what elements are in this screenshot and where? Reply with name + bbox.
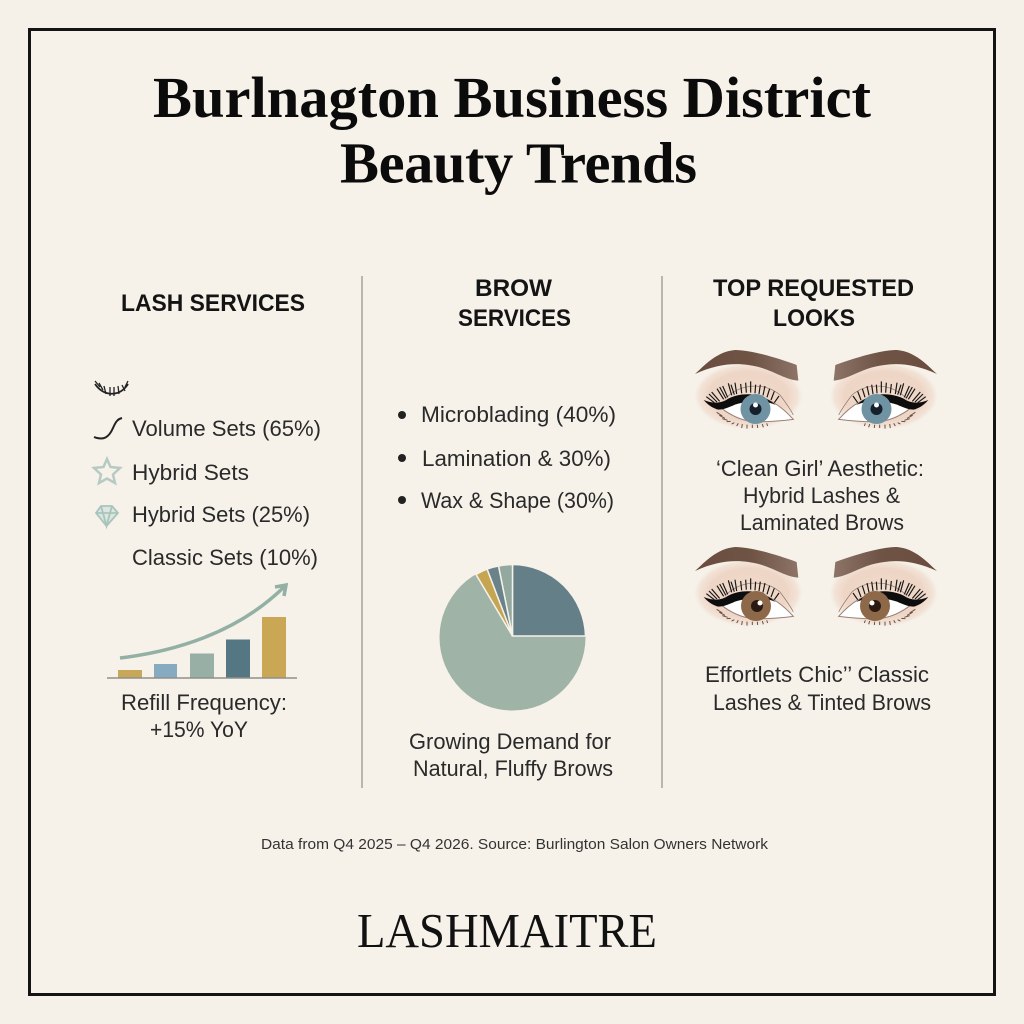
heading: brow services (458, 275, 571, 332)
icon: star (94, 459, 120, 483)
caption: clean girl: Laminated Brows (740, 510, 904, 535)
caption: growing demand: Natural, Fluffy Brows (413, 756, 613, 781)
bar chart: refill frequency (107, 585, 297, 678)
caption: growing demand (409, 729, 613, 781)
logo: lashmaitre: LASHMAITRE (357, 903, 657, 958)
heading: top requested looks (713, 275, 914, 332)
heading: brow services: SERVICES (458, 305, 571, 332)
caption: clean girl: Hybrid Lashes & (743, 483, 900, 508)
title: Beauty Trends (340, 130, 697, 196)
panel: brow services (398, 275, 616, 781)
list: brow services: Microblading (40%) (421, 402, 616, 427)
caption: effortless chic: Effortlets Chic’’ Classic (705, 662, 929, 687)
list: brow services: Lamination & 30%) (422, 446, 611, 471)
heading: lash services: LASH SERVICES (121, 290, 305, 317)
list: brow services (398, 402, 616, 513)
list item: volume sets: Volume Sets (65%) (132, 416, 321, 441)
panel: top requested looks (692, 275, 940, 715)
caption: clean girl (716, 456, 924, 535)
list item: hybrid sets 25: Hybrid Sets (25%) (132, 502, 310, 527)
caption: effortless chic: Lashes & Tinted Brows (713, 690, 931, 715)
icon: diamond (96, 506, 118, 526)
title: Burlnagton Business District (153, 65, 872, 130)
source note: Data from Q4 2025 – Q4 2026. Source: Burlington Salon Owners Network (261, 837, 769, 853)
caption: refill frequency: +15% YoY (150, 717, 248, 742)
caption: refill frequency: Refill Frequency: (121, 690, 287, 715)
title (153, 65, 872, 196)
caption: growing demand: Growing Demand for (409, 729, 611, 754)
icon: lash curl (94, 418, 122, 439)
heading: top requested looks: TOP REQUESTED (713, 275, 914, 302)
caption: effortless chic (705, 662, 931, 715)
list item: classic sets: Classic Sets (10%) (132, 545, 318, 570)
pie chart (440, 564, 586, 710)
illustration: blue eyes (692, 350, 940, 431)
heading: brow services: BROW (475, 275, 552, 302)
list item: hybrid sets: Hybrid Sets (132, 460, 249, 485)
panel: lash services (94, 290, 321, 742)
caption: clean girl: ‘Clean Girl’ Aesthetic: (716, 456, 924, 481)
illustration: brown eyes (692, 547, 940, 628)
caption: refill frequency (121, 690, 287, 742)
heading: top requested looks: LOOKS (773, 305, 855, 332)
list: brow services: Wax & Shape (30%) (421, 488, 614, 513)
arrow: growth (120, 585, 286, 658)
icon: closed eye lashes (95, 381, 128, 396)
